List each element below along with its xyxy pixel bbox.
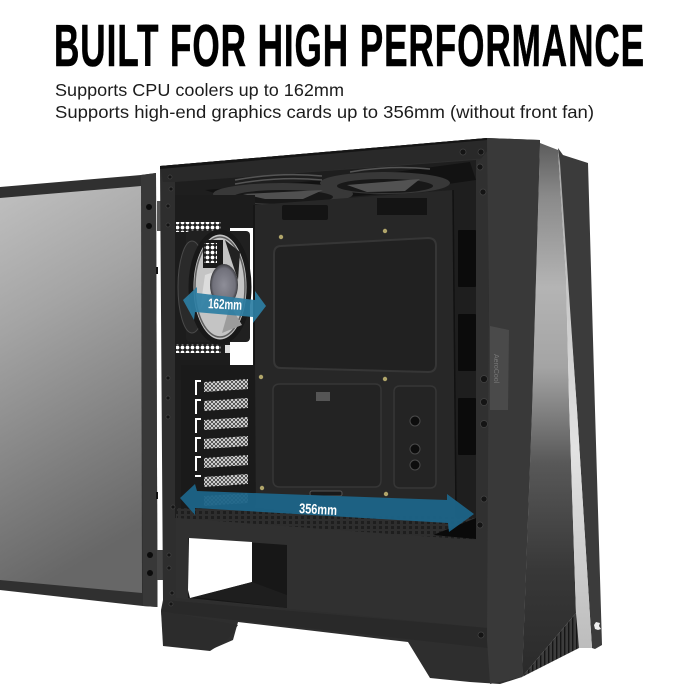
rear fan bay with perforations and cutout xyxy=(175,195,255,380)
expansion slots xyxy=(181,365,255,508)
silver front panel xyxy=(522,143,576,677)
bottom sill xyxy=(161,600,488,648)
text block: specifications xyxy=(55,80,594,122)
AeroCool badge: AeroCool xyxy=(492,354,499,384)
top cable slot xyxy=(282,205,328,220)
bottom shroud panel xyxy=(176,514,488,628)
motherboard tray xyxy=(254,190,456,528)
right grommet cutouts xyxy=(458,230,476,455)
arrow: 356mm graphics card clearance xyxy=(180,484,474,532)
arrow: 356mm graphics card clearance: 356mm xyxy=(299,500,337,518)
mounting standoffs xyxy=(259,229,388,496)
PSU bay opening xyxy=(188,538,287,608)
text block: specifications: Supports CPU coolers up to 162mm xyxy=(55,80,344,100)
front-left frame rail xyxy=(163,170,175,605)
shadow wedge near front of shroud xyxy=(433,518,476,539)
top rail xyxy=(160,138,487,182)
lower left panel xyxy=(273,384,381,487)
case rear dark spine xyxy=(558,148,602,649)
ventilated PSU shroud top xyxy=(177,508,476,540)
top-mounted fans xyxy=(205,162,476,205)
logo mark xyxy=(594,622,601,630)
case foot left xyxy=(161,611,238,651)
CPU cutout panel xyxy=(274,238,436,372)
side front panel xyxy=(487,138,540,684)
case chassis xyxy=(160,138,540,684)
arrow: 162mm CPU cooler clearance xyxy=(183,287,266,323)
AeroCool badge xyxy=(490,326,509,410)
screws along frame rails xyxy=(166,149,488,638)
ventilated front corner xyxy=(522,613,579,677)
right inner rail xyxy=(476,150,490,630)
open glass side door xyxy=(0,173,163,607)
arrow: 162mm CPU cooler clearance: 162mm xyxy=(208,295,242,313)
interior cavity xyxy=(175,160,476,538)
icon: rear case fan xyxy=(178,231,250,342)
bright accent strip xyxy=(558,149,592,648)
text block: specifications: Supports high-end graphics cards up to 356mm (without front fan) xyxy=(55,102,594,122)
lower right drive plate xyxy=(394,386,436,488)
